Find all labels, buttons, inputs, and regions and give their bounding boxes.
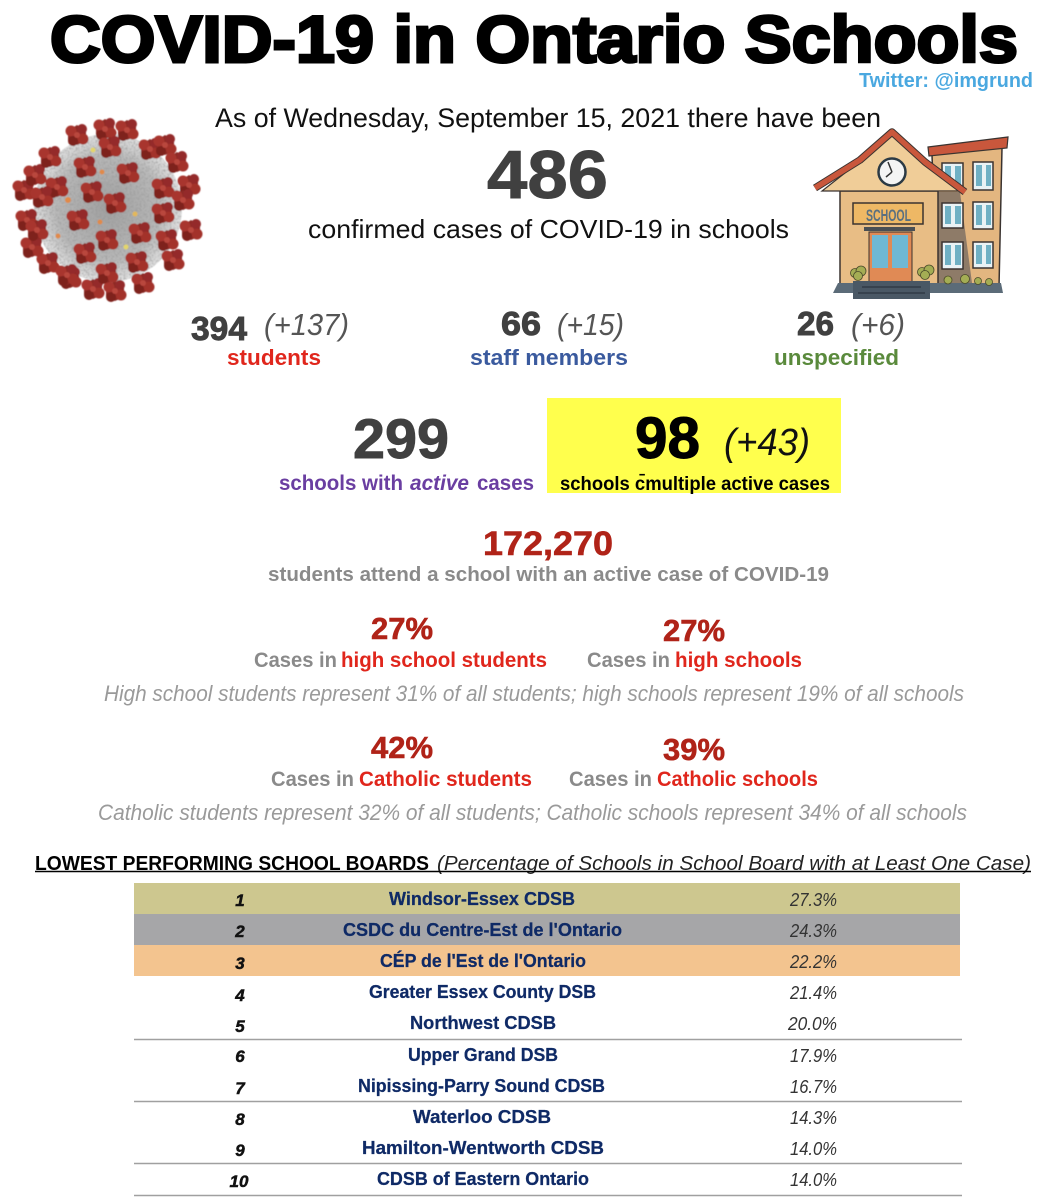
row 7: 16.7% bbox=[790, 1077, 837, 1097]
icon: coronavirus illustration bbox=[12, 118, 202, 302]
row 3: 22.2% bbox=[789, 952, 837, 972]
row 10: CDSB of Eastern Ontario bbox=[377, 1169, 589, 1189]
row 6: 17.9% bbox=[790, 1046, 837, 1066]
row 2: 24.3% bbox=[789, 921, 837, 941]
row 6: Upper Grand DSB bbox=[408, 1045, 558, 1065]
callout: schools with multiple active cases bbox=[547, 398, 841, 495]
school door bbox=[864, 227, 915, 283]
row 4 bbox=[234, 982, 837, 1005]
stat: Catholic students bbox=[271, 730, 532, 791]
stat: schools with active cases bbox=[279, 407, 534, 495]
stat: schools with active cases: 299 bbox=[353, 407, 449, 470]
row 9: 14.0% bbox=[790, 1139, 837, 1159]
row 5: Northwest CDSB bbox=[410, 1013, 556, 1033]
row 5: 5 bbox=[235, 1017, 245, 1036]
stat: schools with active cases: cases bbox=[477, 472, 534, 495]
callout: schools with multiple active cases: 98 bbox=[635, 406, 700, 471]
table heading: (Percentage of Schools in School Board with at Least One Case) bbox=[437, 853, 1031, 875]
row 3: CÉP de l'Est de l'Ontario bbox=[380, 950, 586, 971]
row 2: CSDC du Centre-Est de l'Ontario bbox=[343, 920, 622, 940]
row 9: 9 bbox=[235, 1141, 245, 1160]
stat: Catholic schools: Catholic schools bbox=[657, 768, 818, 791]
row 5 bbox=[235, 1013, 837, 1036]
row 1: 1 bbox=[235, 891, 245, 910]
intro sentence: As of Wednesday, September 15, 2021 there have been bbox=[215, 103, 881, 133]
stat: Catholic students: Cases in bbox=[271, 768, 354, 791]
callout: schools with multiple active cases: (+43) bbox=[724, 422, 810, 464]
row 7: 7 bbox=[235, 1079, 246, 1098]
stat: students: students bbox=[227, 345, 321, 370]
total case caption: confirmed cases of COVID-19 in schools bbox=[308, 214, 789, 244]
stat: high school students bbox=[254, 611, 547, 672]
row 9 bbox=[235, 1138, 837, 1160]
stat: Catholic schools bbox=[569, 732, 818, 791]
stat: unspecified bbox=[774, 305, 905, 370]
callout: schools with multiple active cases: schools c̄multiple active cases bbox=[560, 474, 830, 495]
row 1: Windsor-Essex CDSB bbox=[389, 889, 575, 909]
school base and steps bbox=[833, 281, 1003, 299]
stat: high schools: high schools bbox=[675, 649, 802, 672]
stat: Catholic students: 42% bbox=[371, 730, 433, 765]
stat: unspecified: 26 bbox=[797, 305, 834, 342]
school clock bbox=[878, 158, 906, 186]
row 4: 21.4% bbox=[789, 983, 837, 1003]
icon: school building bbox=[815, 132, 1008, 299]
stat: students attending affected schools: students attend a school with an active case of COVID-19 bbox=[268, 564, 829, 586]
row 2 bbox=[234, 920, 837, 941]
stat: unspecified: unspecified bbox=[774, 345, 899, 370]
table: lowest performing school boards bbox=[134, 883, 962, 1196]
row 1 bbox=[235, 889, 837, 910]
stat: staff members bbox=[470, 305, 628, 370]
row 7 bbox=[235, 1076, 837, 1098]
row 3 bbox=[235, 950, 837, 973]
school sign: SCHOOL bbox=[866, 206, 911, 225]
row 10: 10 bbox=[230, 1172, 249, 1191]
school windows bbox=[942, 162, 993, 269]
row 2: 2 bbox=[234, 922, 245, 941]
school bushes bbox=[850, 265, 992, 286]
twitter credit: Twitter: @imgrund bbox=[859, 70, 1033, 92]
row 3: 3 bbox=[235, 954, 245, 973]
row 8: Waterloo CDSB bbox=[413, 1107, 551, 1127]
school wing bbox=[932, 148, 1002, 287]
stat: Catholic students: Catholic students bbox=[359, 768, 532, 791]
stat: high schools: 27% bbox=[663, 613, 725, 648]
row 8 bbox=[235, 1107, 837, 1129]
row 6: 6 bbox=[235, 1047, 245, 1066]
note: Catholic representation: Catholic students represent 32% of all students; Catholic schools represent 34% of all schools bbox=[98, 800, 967, 825]
row 10: 14.0% bbox=[790, 1170, 837, 1190]
stat: unspecified: (+6) bbox=[851, 307, 905, 342]
stat: schools with active cases: schools with bbox=[279, 472, 403, 495]
school sign bbox=[853, 203, 923, 225]
stat: Catholic schools: 39% bbox=[663, 732, 725, 767]
stat: students bbox=[191, 307, 349, 370]
row 1: 27.3% bbox=[789, 890, 837, 910]
note: high school representation: High school students represent 31% of all students; high schools represent 19% of all schools bbox=[104, 681, 964, 706]
table heading: LOWEST PERFORMING SCHOOL BOARDS bbox=[35, 853, 429, 875]
stat: staff members: 66 bbox=[501, 305, 541, 342]
row 6 bbox=[235, 1045, 837, 1066]
stat: high schools bbox=[587, 613, 802, 672]
stat: schools with active cases: active bbox=[410, 472, 469, 495]
stat: students attending affected schools bbox=[268, 525, 829, 586]
row 5: 20.0% bbox=[787, 1014, 837, 1034]
row 9: Hamilton-Wentworth CDSB bbox=[362, 1138, 604, 1158]
stat: high school students: Cases in bbox=[254, 649, 337, 672]
stat: staff members: (+15) bbox=[557, 307, 624, 342]
school main block bbox=[840, 191, 938, 284]
title: COVID-19 in Ontario Schools bbox=[50, 2, 1018, 76]
total case count: 486 bbox=[487, 137, 608, 213]
stat: students attending affected schools: 172,270 bbox=[483, 525, 613, 563]
stat: high schools: Cases in bbox=[587, 649, 670, 672]
stat: high school students: high school students bbox=[341, 649, 547, 672]
row 10 bbox=[230, 1169, 837, 1191]
stat: students: 394 bbox=[191, 310, 248, 347]
stat: staff members: staff members bbox=[470, 345, 628, 370]
stat: Catholic schools: Cases in bbox=[569, 768, 652, 791]
row 4: Greater Essex County DSB bbox=[369, 982, 596, 1002]
row 8: 14.3% bbox=[790, 1108, 837, 1128]
row 8: 8 bbox=[235, 1110, 245, 1129]
school gable bbox=[822, 136, 960, 191]
table heading bbox=[35, 853, 1031, 875]
row 7: Nipissing-Parry Sound CDSB bbox=[358, 1076, 605, 1096]
stat: high school students: 27% bbox=[371, 611, 433, 646]
row 4: 4 bbox=[234, 986, 245, 1005]
stat: students: (+137) bbox=[264, 307, 349, 342]
